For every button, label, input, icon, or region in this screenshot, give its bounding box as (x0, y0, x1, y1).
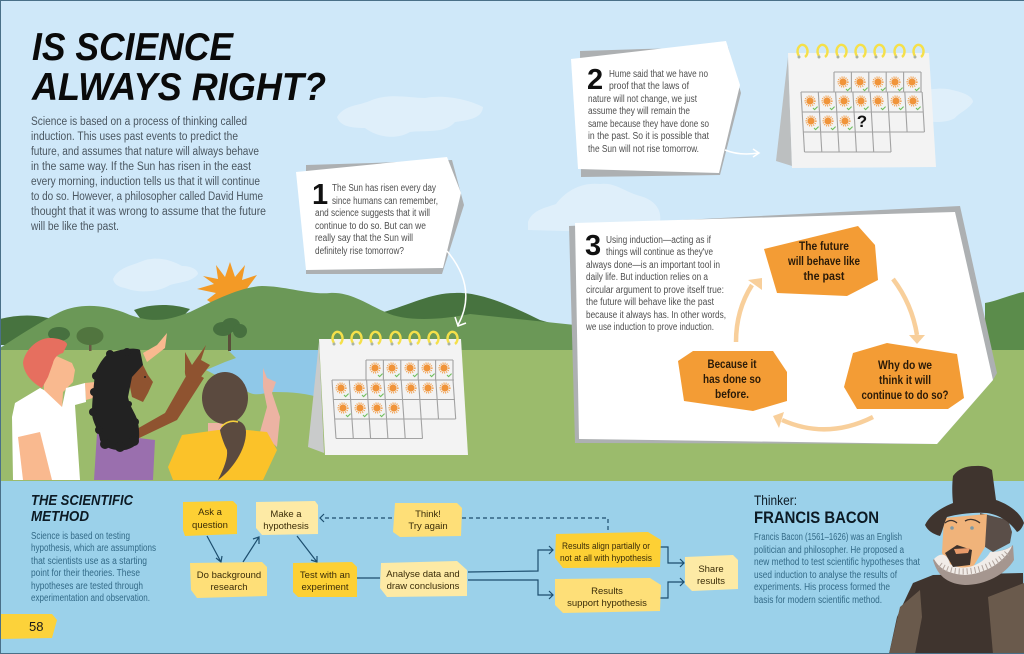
flow box: results support hypothesis: Results (591, 586, 623, 597)
note 1 (296, 157, 464, 274)
panel 3 text: daily life. But induction relies on a (586, 272, 708, 283)
flow box: make a hypothesis: hypothesis (263, 521, 309, 532)
thinker text: used induction to analyse the results of (754, 570, 897, 581)
sky background (0, 0, 1024, 360)
panel 3 text: because it always has. In other words, (586, 310, 726, 321)
cycle box: the future: will behave like (787, 256, 860, 268)
cycle box: why do we think (844, 343, 964, 409)
ground (0, 350, 1024, 481)
intro text: Science is based on a process of thinking called (31, 116, 247, 128)
cycle box: the future (764, 226, 878, 296)
arrow: note 2 to calendar (725, 149, 759, 157)
hills (0, 286, 1024, 350)
intro text: induction. This uses past events to predict the (31, 131, 238, 143)
cycle box: the future: the past (804, 271, 845, 283)
thinker text: basis for modern scientific method. (754, 595, 882, 606)
flow box: share results (685, 555, 738, 591)
thinker text (754, 532, 920, 606)
flow box: think try again: Try again (408, 521, 448, 532)
panel 3 text: circular argument to prove itself true: (586, 285, 724, 296)
intro text: to do so. However, a philosopher called David Hume (31, 191, 263, 203)
flow box: think try again: Think! (415, 509, 441, 520)
note 2: assume they will remain the (588, 106, 690, 117)
flow box: results align partially: Results align partially or (562, 541, 650, 552)
intro text (30, 116, 266, 233)
note 2: the Sun will not rise tomorrow. (588, 144, 699, 155)
panel 3 text: we use induction to prove induction. (585, 322, 714, 333)
note 1: definitely rise tomorrow? (315, 246, 404, 257)
flow box: make a hypothesis (256, 501, 318, 535)
note 2 (571, 41, 741, 177)
thinker text: politician and philosopher. He proposed a (754, 545, 904, 556)
cycle box: because it has: Because it (708, 359, 757, 371)
thinker heading (754, 492, 879, 527)
note 2: 2 (587, 64, 603, 96)
person: woman with dark hair (89, 345, 210, 480)
calendar 2 (776, 45, 936, 168)
note 1: continue to do so. But can we (315, 221, 426, 232)
flow box: test with an experiment (293, 562, 357, 597)
scientific method text: Science is based on testing (31, 531, 130, 542)
flow box: think try again (393, 503, 462, 537)
title: IS SCIENCE (32, 26, 234, 69)
thinker text: new method to test scientific hypotheses that (754, 557, 920, 568)
intro text: thought that it was wrong to assume that the future (31, 206, 266, 218)
flow box: analyse data (380, 561, 467, 597)
flow box: analyse data: draw conclusions (387, 581, 460, 592)
note 2: same because they have done so (588, 119, 709, 130)
scientific method text: point for their theories. These (31, 568, 140, 579)
flow box: do background research (190, 562, 267, 598)
flowchart arrows (207, 514, 684, 599)
scientific method text: hypotheses are tested through (31, 581, 143, 592)
scientific method text: hypothesis, which are assumptions (31, 543, 156, 554)
panel 3 text: the future will behave like the past (586, 297, 714, 308)
bottom band (0, 481, 1024, 654)
title (31, 26, 326, 109)
flow box: results align partially: not at all with hypothesis (560, 553, 652, 564)
arrow: note 1 to calendar (447, 251, 466, 326)
trees (48, 318, 247, 351)
cycle box: because it has (678, 351, 787, 411)
intro text: in the same way. If the Sun has risen in the east (31, 161, 252, 173)
flow box: do background research: research (211, 582, 247, 593)
intro text: future, and assumes that nature will always behave (31, 146, 259, 158)
scientific method heading: METHOD (31, 509, 89, 525)
panel 3 text (585, 235, 726, 333)
thinker text: Francis Bacon (1561–1626) was an English (754, 532, 902, 543)
note 2: in the past. So it is possible that (588, 131, 709, 142)
calendar 2: ? (857, 112, 867, 131)
note 1: and science suggests that it will (315, 208, 430, 219)
calendar 1 (308, 332, 468, 455)
cycle box: because it has: before. (715, 389, 749, 401)
scientific method text: experimentation and observation. (31, 593, 150, 604)
title: ALWAYS RIGHT? (31, 66, 326, 109)
clouds (113, 89, 973, 291)
scientific method heading (31, 493, 133, 525)
page number tab (0, 614, 57, 639)
scientific method text: that scientists use as a starting (31, 556, 147, 567)
cycle box: why do we think: think it will (879, 375, 931, 387)
flow box: ask a question: question (192, 520, 228, 531)
cycle arrows (736, 278, 925, 429)
flow box: test with an experiment: experiment (302, 582, 349, 593)
panel 3 text: things will continue as they've (606, 247, 713, 258)
flow box: ask a question: Ask a (198, 507, 223, 518)
intro text: every morning, induction tells us that it will continue (31, 176, 260, 188)
note 2: nature will not change, we just (588, 94, 697, 105)
cycle box: the future: The future (799, 241, 849, 253)
scientific method heading: THE SCIENTIFIC (31, 493, 133, 509)
note 2: Hume said that we have no (609, 69, 708, 80)
flow box: results support hypothesis: support hypothesis (567, 598, 647, 609)
flow box: results support hypothesis (555, 578, 661, 613)
panel 3 text: Using induction—acting as if (606, 235, 711, 246)
thinker heading: Thinker: (754, 492, 797, 508)
note 1: The Sun has risen every day (332, 183, 436, 194)
panel 3 (569, 206, 997, 444)
person: woman with ponytail (168, 368, 280, 480)
thinker text: experiments. His process formed the (754, 582, 890, 593)
thinker heading: FRANCIS BACON (754, 509, 879, 527)
scientific method text (31, 531, 156, 604)
flow box: share results: Share (698, 564, 724, 575)
sun (197, 262, 257, 310)
portrait: Francis Bacon (889, 466, 1024, 654)
cycle box: why do we think: Why do we (878, 360, 932, 372)
panel 3: 3 (585, 230, 601, 262)
note 1: since humans can remember, (332, 196, 438, 207)
note 2: proof that the laws of (609, 81, 689, 92)
panel 3 text: always done—is an important tool in (586, 260, 720, 271)
lake (206, 350, 318, 397)
page number tab: 58 (29, 619, 43, 634)
flow box: ask a question (183, 501, 237, 536)
intro text: will be like the past. (30, 221, 119, 233)
flow box: share results: results (697, 576, 725, 587)
person: man in white shirt (12, 333, 167, 480)
flow box: make a hypothesis: Make a (270, 509, 302, 520)
note 1: 1 (312, 179, 328, 211)
cycle box: because it has: has done so (703, 374, 761, 386)
flow box: test with an experiment: Test with an (300, 570, 350, 581)
flow box: do background research: Do background (197, 570, 261, 581)
cycle box: why do we think: continue to do so? (862, 390, 948, 402)
flow box: analyse data: Analyse data and (386, 569, 460, 580)
flow box: results align partially (555, 532, 661, 568)
note 1: really say that the Sun will (315, 233, 413, 244)
